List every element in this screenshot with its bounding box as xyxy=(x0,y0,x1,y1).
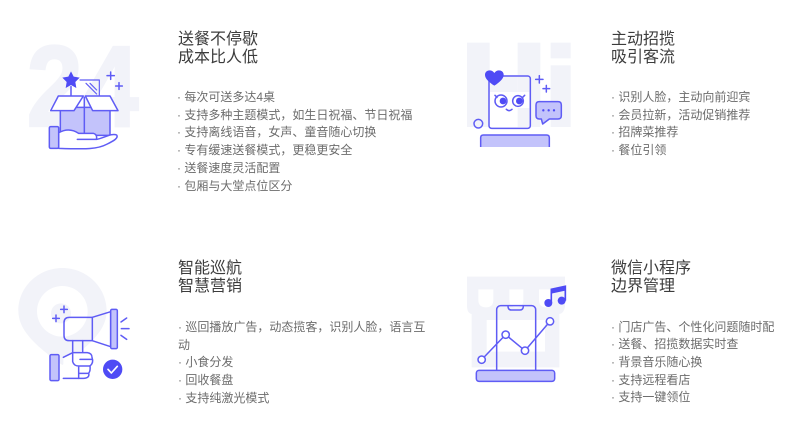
heading: panel 3: 智慧营销 xyxy=(178,278,242,295)
heading: panel 1 xyxy=(178,30,258,66)
speech bubble xyxy=(536,102,561,124)
check badge xyxy=(103,360,122,379)
heading: panel 4: 微信小程序 xyxy=(611,260,691,277)
base xyxy=(476,370,555,381)
list: panel 1 features: · 包厢与大堂点位区分 xyxy=(177,179,292,193)
icon: open box on hand with 24 backdrop xyxy=(27,23,139,151)
heading: panel 3 xyxy=(178,259,242,295)
music notes xyxy=(544,286,566,307)
eyes and smile xyxy=(495,95,525,111)
list: panel 3 features xyxy=(178,320,425,405)
small ring xyxy=(474,119,483,128)
heading: panel 3: 智能巡航 xyxy=(178,260,242,277)
list: panel 3 features: · 回收餐盘 xyxy=(178,373,233,387)
box body xyxy=(60,97,110,135)
list: panel 4 features: · 支持远程看店 xyxy=(611,373,690,387)
megaphone xyxy=(64,309,117,352)
list: panel 2 features: · 会员拉新，活动促销推荐 xyxy=(611,108,750,122)
backdrop: Hi letters xyxy=(467,43,571,127)
sparkles xyxy=(536,76,550,92)
heart xyxy=(485,70,504,86)
sound rays xyxy=(121,318,129,339)
icon: smiling card with Hi backdrop xyxy=(467,42,570,147)
list: panel 2 features: · 识别人脸，主动向前迎宾 xyxy=(611,90,750,104)
box flaps xyxy=(51,96,118,111)
list: panel 1 features: · 送餐速度灵活配置 xyxy=(177,161,280,175)
list: panel 4 features: · 支持一键领位 xyxy=(611,390,690,404)
heading: panel 4: 边界管理 xyxy=(611,278,675,295)
list: panel 1 features xyxy=(177,90,412,193)
backdrop: 24 numeral: 24 xyxy=(27,23,139,151)
heading: panel 4 xyxy=(611,259,691,295)
list: panel 3 features: · 小食分发 xyxy=(178,355,233,369)
list: panel 3 features: · 巡回播放广告，动态揽客，识别人脸，语言互 xyxy=(178,320,425,334)
list: panel 2 features: · 招牌菜推荐 xyxy=(611,125,678,139)
list: panel 1 features: · 支持多种主题模式，如生日祝福、节日祝福 xyxy=(177,108,412,122)
list: panel 2 features: · 餐位引领 xyxy=(611,143,666,157)
heading: panel 1: 送餐不停歇 xyxy=(178,31,258,48)
icon: megaphone in hand with map pin backdrop xyxy=(18,268,130,382)
list: panel 1 features: · 专有缓速送餐模式，更稳更安全 xyxy=(177,143,352,157)
list: panel 4 features: · 背景音乐随心换 xyxy=(611,355,702,369)
phone xyxy=(497,306,536,376)
icon: phone with line chart and storefront backdrop xyxy=(467,276,566,382)
hand xyxy=(49,127,117,149)
star xyxy=(62,71,80,95)
list: panel 3 features: 动 xyxy=(178,338,190,352)
backdrop: map pin xyxy=(18,268,107,365)
paper in box xyxy=(80,80,99,96)
list: panel 4 features xyxy=(611,320,774,404)
line chart xyxy=(478,318,554,363)
heading: panel 2 xyxy=(611,30,675,66)
list: panel 1 features: · 每次可送多达4桌 xyxy=(177,90,275,104)
list: panel 4 features: · 门店广告、个性化问题随时配 xyxy=(611,320,774,334)
hand xyxy=(50,353,93,381)
heading: panel 2: 主动招揽 xyxy=(611,31,675,48)
heading: panel 2: 吸引客流 xyxy=(611,49,675,66)
sparkles xyxy=(107,72,122,89)
backdrop: storefront xyxy=(467,277,565,367)
list: panel 4 features: · 送餐、招揽数据实时查 xyxy=(611,337,738,351)
list: panel 2 features xyxy=(611,90,750,157)
sparkles xyxy=(53,306,67,322)
base xyxy=(481,135,549,147)
list: panel 3 features: · 支持纯激光模式 xyxy=(178,391,269,405)
card xyxy=(489,76,530,128)
list: panel 1 features: · 支持离线语音，女声、童音随心切换 xyxy=(177,125,376,139)
heading: panel 1: 成本比人低 xyxy=(178,49,258,66)
